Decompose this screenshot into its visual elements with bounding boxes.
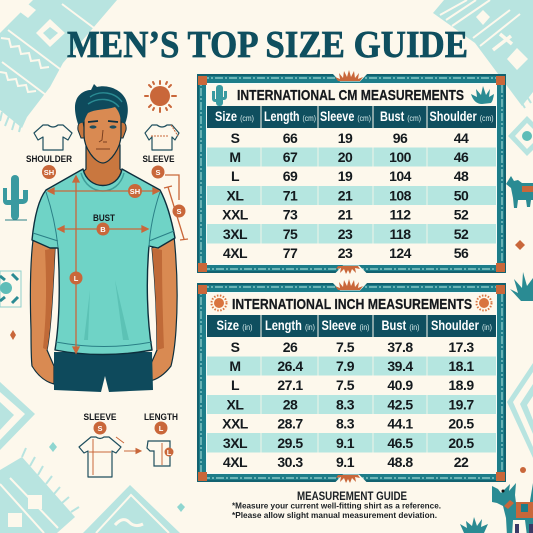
table rows: 19: [338, 130, 353, 146]
head: [78, 122, 126, 138]
figure: man: B: [100, 225, 106, 234]
icon: cactus: [3, 175, 28, 220]
table rows: 40.9: [387, 377, 413, 393]
table rows: 52: [454, 226, 469, 242]
table rows: 4XL: [223, 454, 248, 470]
table rows: [207, 337, 496, 472]
table rows: 8.3: [336, 416, 355, 432]
icon: folded tee: [147, 441, 174, 466]
table rows: M: [229, 358, 241, 374]
table header: Size (cm): [215, 109, 254, 124]
table rows: 46.5: [387, 435, 413, 451]
table rows: 44: [454, 130, 469, 146]
blanket pattern: bottom left: [0, 448, 79, 533]
table header: Shoulder (in): [431, 318, 492, 333]
table rows: 71: [283, 188, 298, 204]
table rows: 48: [454, 168, 469, 184]
table rows: 17.3: [448, 339, 474, 355]
table rows: 19.7: [448, 396, 474, 412]
table rows: 52: [454, 206, 469, 222]
table rows: S: [231, 130, 240, 146]
table rows: 4XL: [223, 245, 248, 261]
table rows: 8.3: [336, 396, 355, 412]
table rows: 28.7: [277, 416, 303, 432]
label: length and badge: L: [159, 424, 164, 433]
table header: [207, 106, 496, 128]
table rows: 20.5: [448, 435, 474, 451]
table rows: M: [229, 149, 241, 165]
label: sleeve: SLEEVE: [142, 154, 174, 165]
decorative dot: [515, 240, 525, 250]
icon: folded tee: L: [167, 448, 172, 457]
measurement guide: *Please allow slight manual measurement deviation.: [232, 510, 437, 520]
table rows: 20: [338, 149, 353, 165]
table rows: XL: [227, 188, 244, 204]
table header: Shoulder (cm): [430, 109, 494, 124]
table rows: S: [231, 339, 240, 355]
table rows: 21: [338, 206, 353, 222]
table rows: 20.5: [448, 416, 474, 432]
tile pattern left: [0, 382, 35, 450]
figure: man: S: [176, 207, 182, 216]
heading: cm: INTERNATIONAL CM MEASUREMENTS: [237, 87, 464, 104]
icon: shoulder tee: [34, 125, 72, 150]
table header: [207, 315, 496, 337]
label: sleeve and badge: S: [97, 424, 103, 433]
blanket pattern: bottom centre: [83, 485, 180, 533]
table rows: 18.1: [448, 358, 474, 374]
arrow: [124, 448, 141, 454]
table rows: 96: [393, 130, 408, 146]
table rows: 50: [454, 188, 469, 204]
icon: flat tee with measurements: [79, 437, 124, 477]
table rows: 30.3: [277, 454, 303, 470]
tile pattern right: [507, 363, 533, 458]
table rows: 69: [283, 168, 298, 184]
shorts: [54, 352, 153, 392]
measurement guide: [232, 491, 441, 520]
table rows: 56: [454, 245, 469, 261]
table rows: L: [231, 377, 240, 393]
table rows: 7.5: [336, 377, 355, 393]
icon: tile top right: [508, 116, 533, 156]
table rows: 18.9: [448, 377, 474, 393]
table rows: 100: [389, 149, 412, 165]
panel: inch measurements: [197, 279, 506, 483]
title: MEN’S TOP SIZE GUIDE: [67, 24, 468, 66]
decorative dots: [49, 442, 185, 512]
table rows: 77: [283, 245, 298, 261]
table rows: 23: [338, 245, 353, 261]
decorative dot: [10, 330, 16, 340]
table rows: 28: [283, 396, 298, 412]
table rows: 27.1: [277, 377, 303, 393]
badge: SH: SH: [44, 168, 54, 177]
label: length and badge: [144, 412, 178, 434]
table header: Length (cm): [264, 109, 316, 124]
table rows: 44.1: [387, 416, 413, 432]
table rows: 48.8: [387, 454, 413, 470]
blanket pattern: top right: [433, 0, 533, 108]
face: [88, 121, 118, 122]
measurement guide: *Measure your current well-fitting shirt as a reference.: [232, 500, 441, 510]
table rows: 67: [283, 149, 298, 165]
table rows: 19: [338, 168, 353, 184]
heading: inch: INTERNATIONAL INCH MEASUREMENTS: [232, 296, 472, 313]
table rows: 7.9: [336, 358, 355, 374]
table rows: 75: [283, 226, 298, 242]
icon: agave in header: [471, 86, 494, 104]
hair: [75, 84, 128, 124]
icon: sleeve tee: [145, 125, 179, 150]
blanket pattern: top left: [0, 0, 117, 132]
shirt: [32, 169, 175, 354]
table rows: 7.5: [336, 339, 355, 355]
table rows: 21: [338, 188, 353, 204]
table rows: 39.4: [387, 358, 413, 374]
table rows: 66: [283, 130, 298, 146]
icon: agave right: [510, 272, 533, 301]
table rows: 26.4: [277, 358, 303, 374]
table header: Sleeve (cm): [320, 109, 371, 124]
icon: sun left: [212, 296, 226, 310]
figure: man: L: [74, 274, 79, 283]
table rows: 23: [338, 226, 353, 242]
icon: sun right: [476, 296, 492, 310]
table rows: 3XL: [223, 435, 248, 451]
table rows: 112: [389, 206, 411, 222]
table rows: 22: [454, 454, 469, 470]
figure: man: SH: [130, 187, 140, 196]
figure: man: S: [155, 168, 161, 177]
measurement arrows: [48, 175, 188, 353]
icon: cactus in header: [212, 85, 227, 106]
table rows: XL: [227, 396, 244, 412]
icon: small donkey right: [506, 176, 533, 208]
figure: man: [30, 84, 188, 392]
label: shoulder: SHOULDER: [26, 154, 72, 165]
decorative dot: [520, 467, 526, 473]
table header: Bust (in): [382, 318, 420, 333]
panel: cm measurements: [197, 70, 506, 274]
table header: Sleeve (in): [322, 318, 370, 333]
table header: Length (in): [265, 318, 315, 333]
table header: Bust (cm): [380, 109, 421, 124]
icon: tile left: [0, 271, 21, 307]
table rows: [207, 128, 496, 263]
table rows: 73: [283, 206, 298, 222]
table rows: 26: [283, 339, 298, 355]
label: sleeve and badge: SLEEVE: [84, 412, 116, 423]
icon: sun: [145, 81, 176, 112]
table rows: 9.1: [336, 435, 355, 451]
table header: Size (in): [216, 318, 253, 333]
label: length and badge: LENGTH: [144, 412, 178, 423]
badge: SH: [42, 165, 56, 179]
table rows: XXL: [222, 416, 249, 432]
table rows: 118: [389, 226, 411, 242]
badges on shirt: [128, 184, 142, 198]
table rows: 37.8: [387, 339, 413, 355]
table rows: 108: [389, 188, 412, 204]
label: sleeve and badge: [84, 412, 116, 434]
table rows: XXL: [222, 206, 249, 222]
icon: agave bottom: [460, 517, 488, 533]
table rows: L: [231, 168, 240, 184]
table rows: 104: [389, 168, 412, 184]
table rows: 46: [454, 149, 469, 165]
neck: [78, 145, 128, 191]
table rows: 42.5: [387, 396, 413, 412]
table rows: 29.5: [277, 435, 303, 451]
table rows: 3XL: [223, 226, 248, 242]
icon: donkey bottom right: [492, 483, 533, 533]
arms: [30, 240, 55, 384]
figure: man: BUST: [93, 213, 115, 224]
table rows: 9.1: [336, 454, 355, 470]
table rows: 124: [389, 245, 412, 261]
measurement guide: MEASUREMENT GUIDE: [297, 491, 407, 503]
